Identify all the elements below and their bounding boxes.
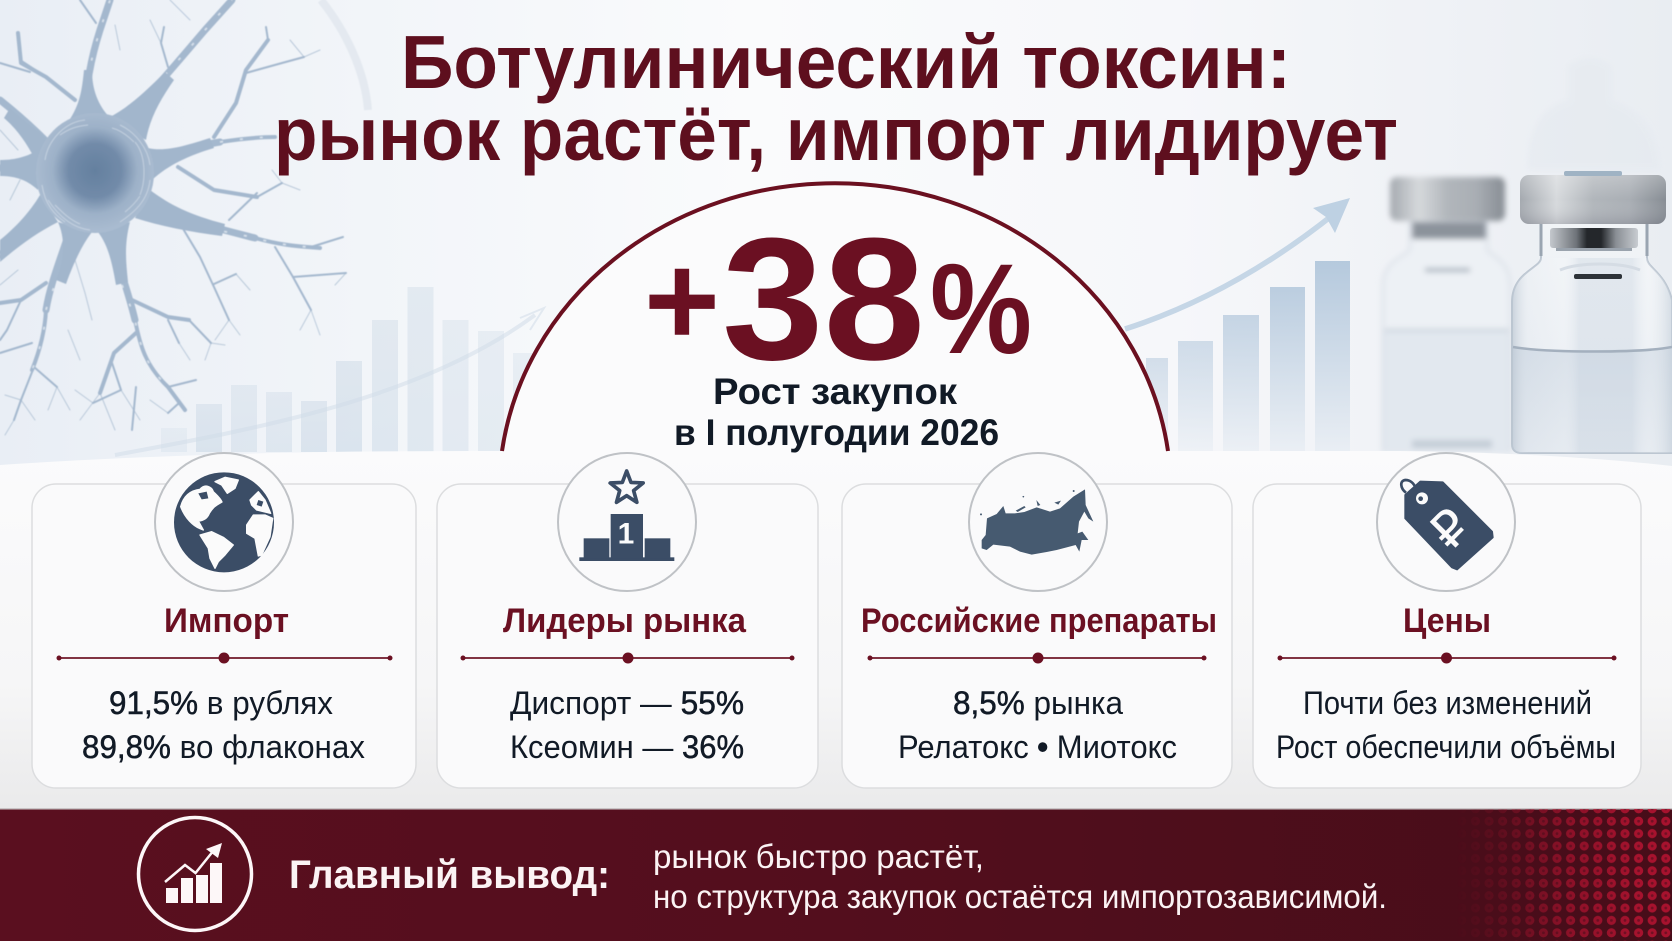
divider [56,652,392,664]
text: takeaway: рынок быстро растёт, [653,838,984,875]
key figure: +38%: % [930,238,1032,381]
ghost bottle [1528,58,1660,170]
background arrow: left faint trend [115,308,544,455]
text: import shares [82,685,365,765]
text: takeaway [653,838,1387,915]
text: russian share: Релатокс • Миотокс [898,729,1177,765]
lower panel backdrop [0,451,1672,809]
panel: market leaders [437,453,818,788]
icon: growth chart [138,818,252,930]
text: takeaway: но структура закупок остаётся импортозависимой. [653,878,1387,915]
bottom banner [0,808,1672,941]
background bar chart: left faded bars [161,287,539,452]
icon: back vial [1383,177,1510,451]
text: import shares: 91,5% в рублях [109,685,333,721]
heading: Цены [1403,602,1491,640]
background bar chart: right bars [1146,261,1350,451]
title [274,20,1398,176]
panel: russian products [842,453,1232,788]
heading: Лидеры рынка [503,602,747,640]
key figure: +38% [644,201,1032,396]
icon: front vial [1512,171,1672,453]
text: russian share: 8,5% рынка [953,685,1123,721]
dendrite beading [0,0,320,387]
icon: map of russia [969,453,1107,591]
panel: prices [1253,453,1641,788]
icon: globe [155,453,293,591]
key figure: +38%: + [644,227,720,373]
key figure: +38%: 38 [722,201,925,396]
icon: price tag [1377,453,1515,591]
text: price notes: Почти без изменений [1303,685,1592,721]
title: Ботулинический токсин: [401,20,1291,104]
central arch [502,183,1168,451]
icon: podium [558,453,696,591]
growth arrow [1125,198,1350,329]
divider [868,652,1206,664]
text: price notes: Рост обеспечили объёмы [1276,729,1616,765]
text: price notes [1276,685,1616,765]
key figure caption [674,371,999,453]
heading: Импорт [164,602,289,640]
neuron illustration [0,0,368,435]
divider [1278,652,1616,664]
text: leader shares: Диспорт — 55% [510,685,744,721]
icon: podium: 1 [618,518,634,551]
text: leader shares [510,685,744,765]
text: import shares: 89,8% во флаконах [82,729,365,765]
heading: main takeaway: Главный вывод: [289,853,610,897]
panel: import [32,453,416,788]
divider [460,652,794,664]
key figure caption: в I полугодии 2026 [674,412,999,453]
key figure caption: Рост закупок [713,371,957,412]
text: russian share [898,685,1177,765]
soma cones [0,70,225,285]
icon: price tag: ₽ [1418,497,1482,561]
title: рынок растёт, импорт лидирует [274,92,1398,176]
text: leader shares: Ксеомин — 36% [510,729,744,765]
heading: Российские препараты [861,602,1217,640]
